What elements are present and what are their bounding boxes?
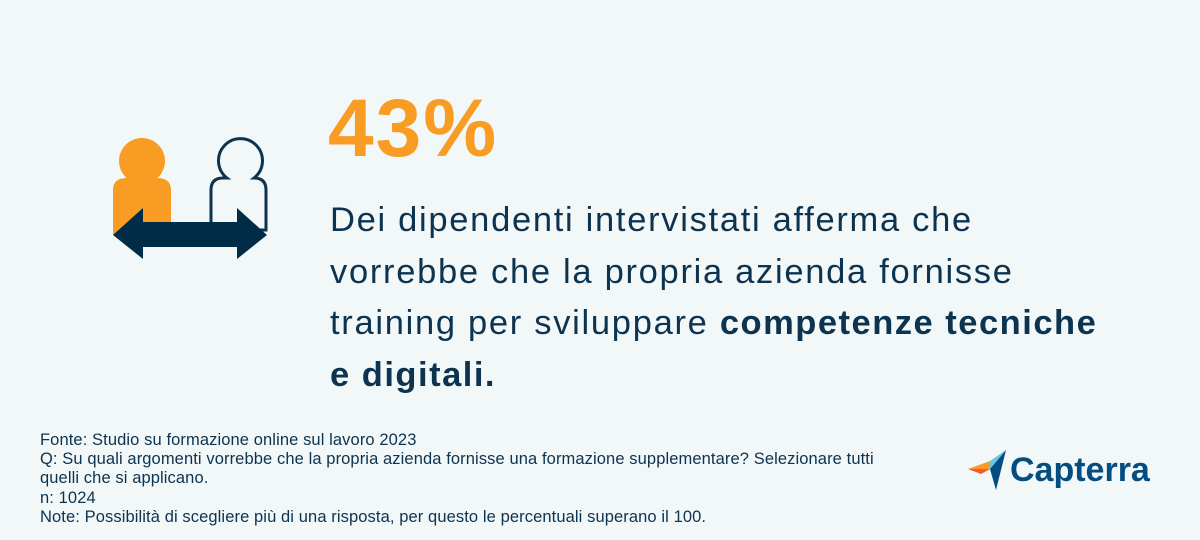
- double arrow: [113, 208, 267, 259]
- icon: two people with arrow: [113, 137, 268, 259]
- footer source notes: Note: Possibilità di scegliere più di una risposta, per questo le percentuali superano il 100.: [40, 508, 706, 526]
- footer source notes: quelli che si applicano.: [40, 469, 208, 487]
- body text: e digitali.: [330, 356, 496, 394]
- orange person: [113, 138, 171, 235]
- footer source notes: n: 1024: [40, 489, 96, 507]
- body text: training per sviluppare competenze tecniche: [330, 304, 1097, 342]
- outline person: [211, 139, 266, 230]
- headline stat: 43%: [328, 83, 498, 174]
- body text: vorrebbe che la propria azienda fornisse: [330, 252, 1014, 290]
- footer source notes: Fonte: Studio su formazione online sul lavoro 2023: [40, 431, 416, 449]
- footer source notes: Q: Su quali argomenti vorrebbe che la propria azienda fornisse una formazione supplementare? Selezionare tutti: [40, 450, 874, 468]
- logo: Capterra: Capterra: [1010, 451, 1150, 489]
- footer source notes: [40, 431, 874, 526]
- body text: Dei dipendenti intervistati afferma che: [330, 201, 973, 239]
- body text: [330, 201, 1097, 394]
